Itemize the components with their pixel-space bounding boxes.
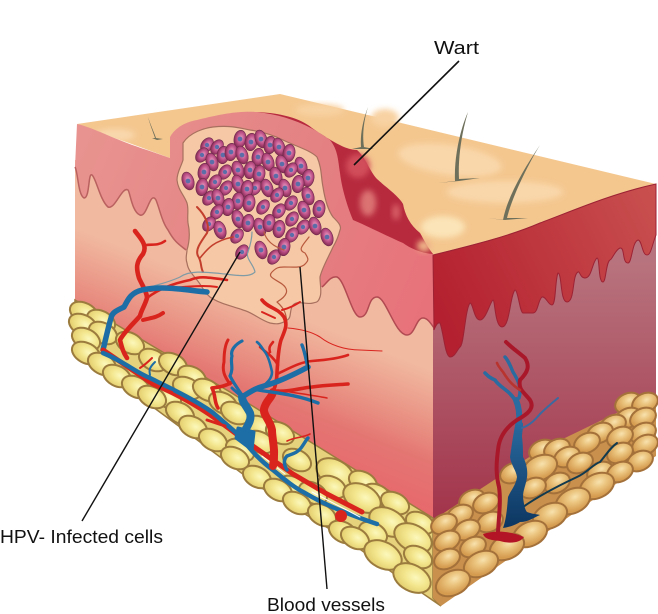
panel: right face dermis: [433, 184, 656, 522]
pocket capillaries: [142, 207, 309, 323]
red blob: [335, 510, 347, 522]
icon: hair 2: [352, 107, 374, 149]
blue main vein: [103, 288, 207, 350]
panel: infected tissue pocket: [177, 126, 341, 324]
label: HPV-infected cells: HPV- Infected cells: [0, 527, 163, 547]
leader line: wart: [354, 61, 459, 165]
artery branches: [140, 302, 382, 441]
panel: left fat layer: [65, 297, 441, 606]
white highlight: [262, 456, 360, 517]
right artery: [497, 342, 532, 532]
panel: right fat layer: [428, 389, 658, 606]
blood vessels: left network: [103, 207, 382, 524]
red branch: [120, 231, 227, 358]
blue branches: [150, 341, 318, 470]
blood vessels: right network: [483, 342, 617, 543]
leader line: blood vessels: [300, 267, 327, 589]
panel: left face dermis: [75, 160, 433, 522]
panel: left epidermis: [75, 112, 434, 335]
long artery: [103, 350, 362, 512]
right vein trunk: [503, 420, 540, 528]
panel: top skin surface: [77, 94, 656, 255]
hair follicles: [148, 107, 540, 220]
icon: hair 4: [488, 145, 540, 220]
vein junction: [236, 428, 254, 450]
cells: HPV-infected cell cluster: [180, 128, 335, 267]
epidermis right border: [322, 277, 434, 335]
panel: wart bulge: [257, 112, 433, 254]
panel: right epidermis: [433, 184, 656, 357]
central artery upper: [262, 300, 286, 392]
long vein: [103, 353, 377, 524]
leader line: infected cells: [82, 252, 240, 521]
central artery lower: [264, 392, 274, 466]
icon: hair 3: [438, 112, 480, 183]
epidermis wavy border: [75, 167, 186, 250]
label: wart: Wart: [434, 38, 479, 58]
icon: hair 1: [148, 117, 163, 140]
cut artery end: [483, 532, 524, 543]
right thin dark vessel: [523, 443, 617, 507]
